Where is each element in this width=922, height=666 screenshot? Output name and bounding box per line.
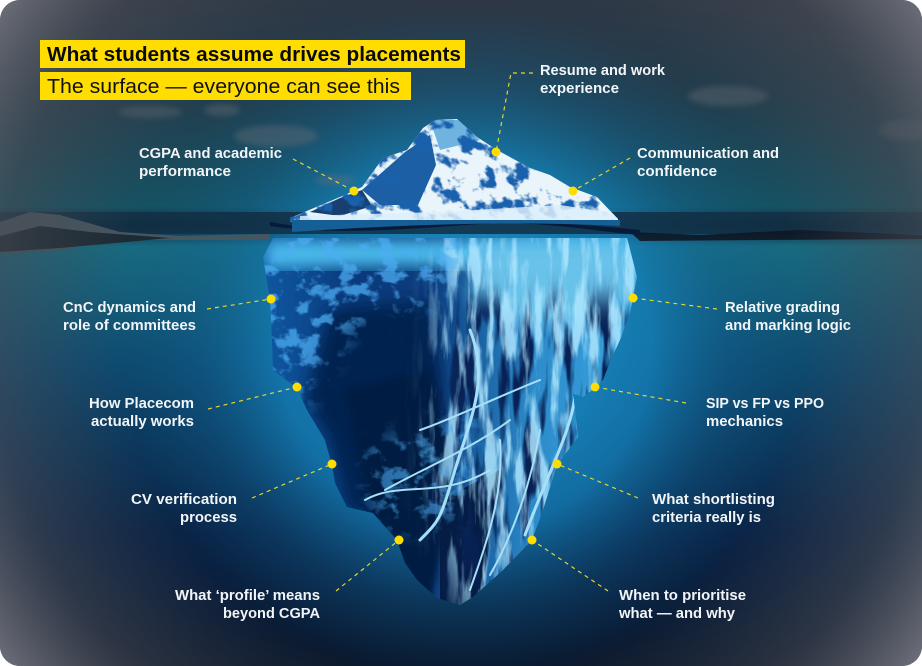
label: prioritise: what — and why — [618, 606, 735, 622]
label: CV: CV verification — [131, 492, 237, 508]
label: SIP: SIP vs FP vs PPO — [706, 396, 824, 412]
label: resume — [540, 63, 666, 97]
label: SIP: mechanics — [706, 414, 783, 430]
iceberg — [263, 119, 640, 605]
label: relative grading: and marking logic — [725, 318, 851, 334]
label: CV: process — [180, 510, 237, 526]
label: profile: beyond CGPA — [223, 606, 321, 622]
label: SIP — [706, 398, 824, 426]
label: communication: confidence — [637, 164, 717, 180]
label: relative grading — [725, 300, 851, 334]
label: shortlisting: What shortlisting — [652, 492, 775, 508]
label: relative grading: Relative grading — [725, 300, 840, 316]
label: resume: experience — [540, 81, 619, 97]
label: Placecom: actually works — [91, 414, 194, 430]
waterline — [270, 222, 640, 235]
label: profile: What ‘profile’ means — [175, 588, 320, 604]
subtitle: The surface — everyone can see this — [47, 76, 400, 98]
label: CV — [131, 492, 237, 526]
iceberg: veined left face — [264, 238, 476, 412]
iceberg: pale vertical ice — [409, 238, 636, 605]
marker dots — [266, 148, 638, 544]
label: resume: Resume and work — [540, 63, 666, 79]
label: Placecom: How Placecom — [89, 396, 194, 412]
label: shortlisting — [652, 492, 775, 526]
label: profile — [175, 588, 321, 622]
label: prioritise — [618, 588, 746, 622]
annotation connectors — [207, 73, 717, 591]
iceberg: tip above water — [290, 119, 618, 222]
clouds — [118, 86, 922, 185]
label: CnC: CnC dynamics and — [63, 300, 196, 316]
label: CGPA: CGPA and academic — [139, 146, 282, 162]
title: What students assume drives placements — [47, 44, 461, 66]
label: CGPA: performance — [139, 164, 231, 180]
label: shortlisting: criteria really is — [652, 510, 761, 526]
label: CnC: role of committees — [63, 318, 196, 334]
distant ice and horizon — [0, 212, 922, 254]
label: CnC — [64, 301, 196, 330]
label: CGPA — [139, 146, 282, 180]
label: Placecom — [89, 396, 194, 430]
label: prioritise: When to prioritise — [619, 588, 746, 604]
iceberg: underwater mass — [263, 238, 637, 605]
iceberg: dark crevices — [431, 278, 634, 582]
label: communication: Communication and — [637, 146, 779, 162]
label: communication — [638, 147, 778, 176]
